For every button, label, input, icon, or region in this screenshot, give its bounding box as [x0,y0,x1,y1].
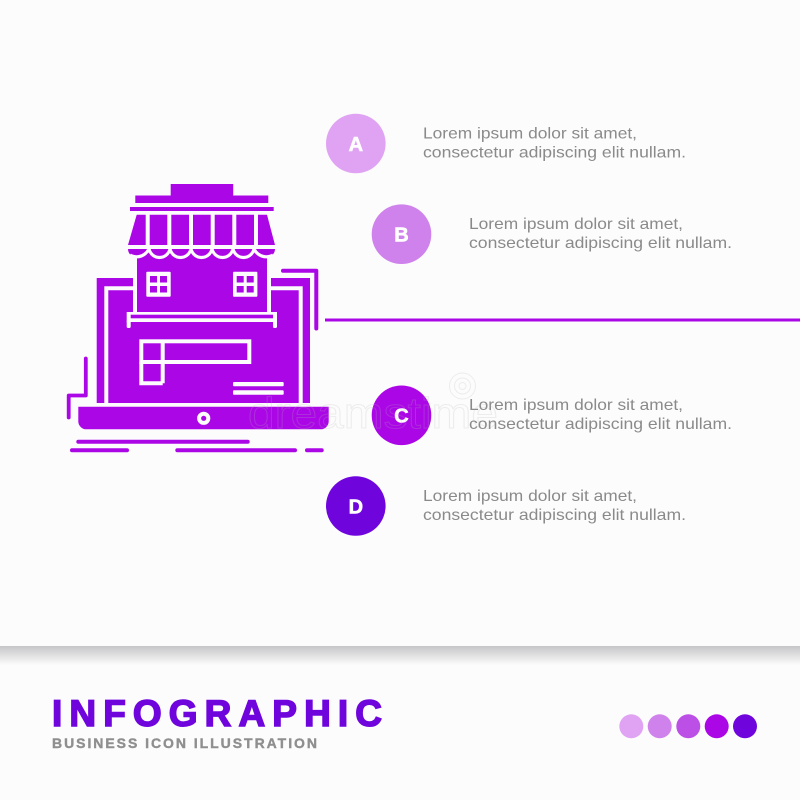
step C: consectetur adipiscing elit nullam. [469,416,732,433]
left accent line [69,358,86,418]
colour dots [619,714,757,738]
step B: Lorem ipsum dolor sit amet, [469,216,683,233]
step D: Lorem ipsum dolor sit amet, [423,488,637,505]
screen text lines [233,382,284,395]
step C [372,386,732,445]
step A: Lorem ipsum dolor sit amet, [423,125,637,142]
step A: A [349,134,363,156]
step D: D [349,496,363,518]
laptop base [78,407,329,429]
title: INFOGRAPHIC [52,693,382,734]
subtitle: BUSINESS ICON ILLUSTRATION [52,735,317,751]
step B [372,204,732,264]
step B: B [394,224,409,246]
awning [128,214,275,258]
step B: consectetur adipiscing elit nullam. [469,235,732,252]
screen accent line [283,271,316,328]
step A [326,114,686,173]
screen content form [141,341,249,383]
icon: online shop on laptop [69,184,329,452]
watermark [248,373,498,438]
store shelf [127,312,277,328]
store building [133,250,271,316]
step C: Lorem ipsum dolor sit amet, [469,397,683,414]
store windows [146,272,257,297]
storefront roof [130,184,274,211]
step D: consectetur adipiscing elit nullam. [423,507,686,524]
connector line [325,318,800,322]
step C: C [394,406,409,428]
step D [326,476,686,536]
laptop screen [97,278,310,403]
step A: consectetur adipiscing elit nullam. [423,144,686,162]
ground lines [70,440,324,452]
watermark: dreamstime [248,389,498,438]
